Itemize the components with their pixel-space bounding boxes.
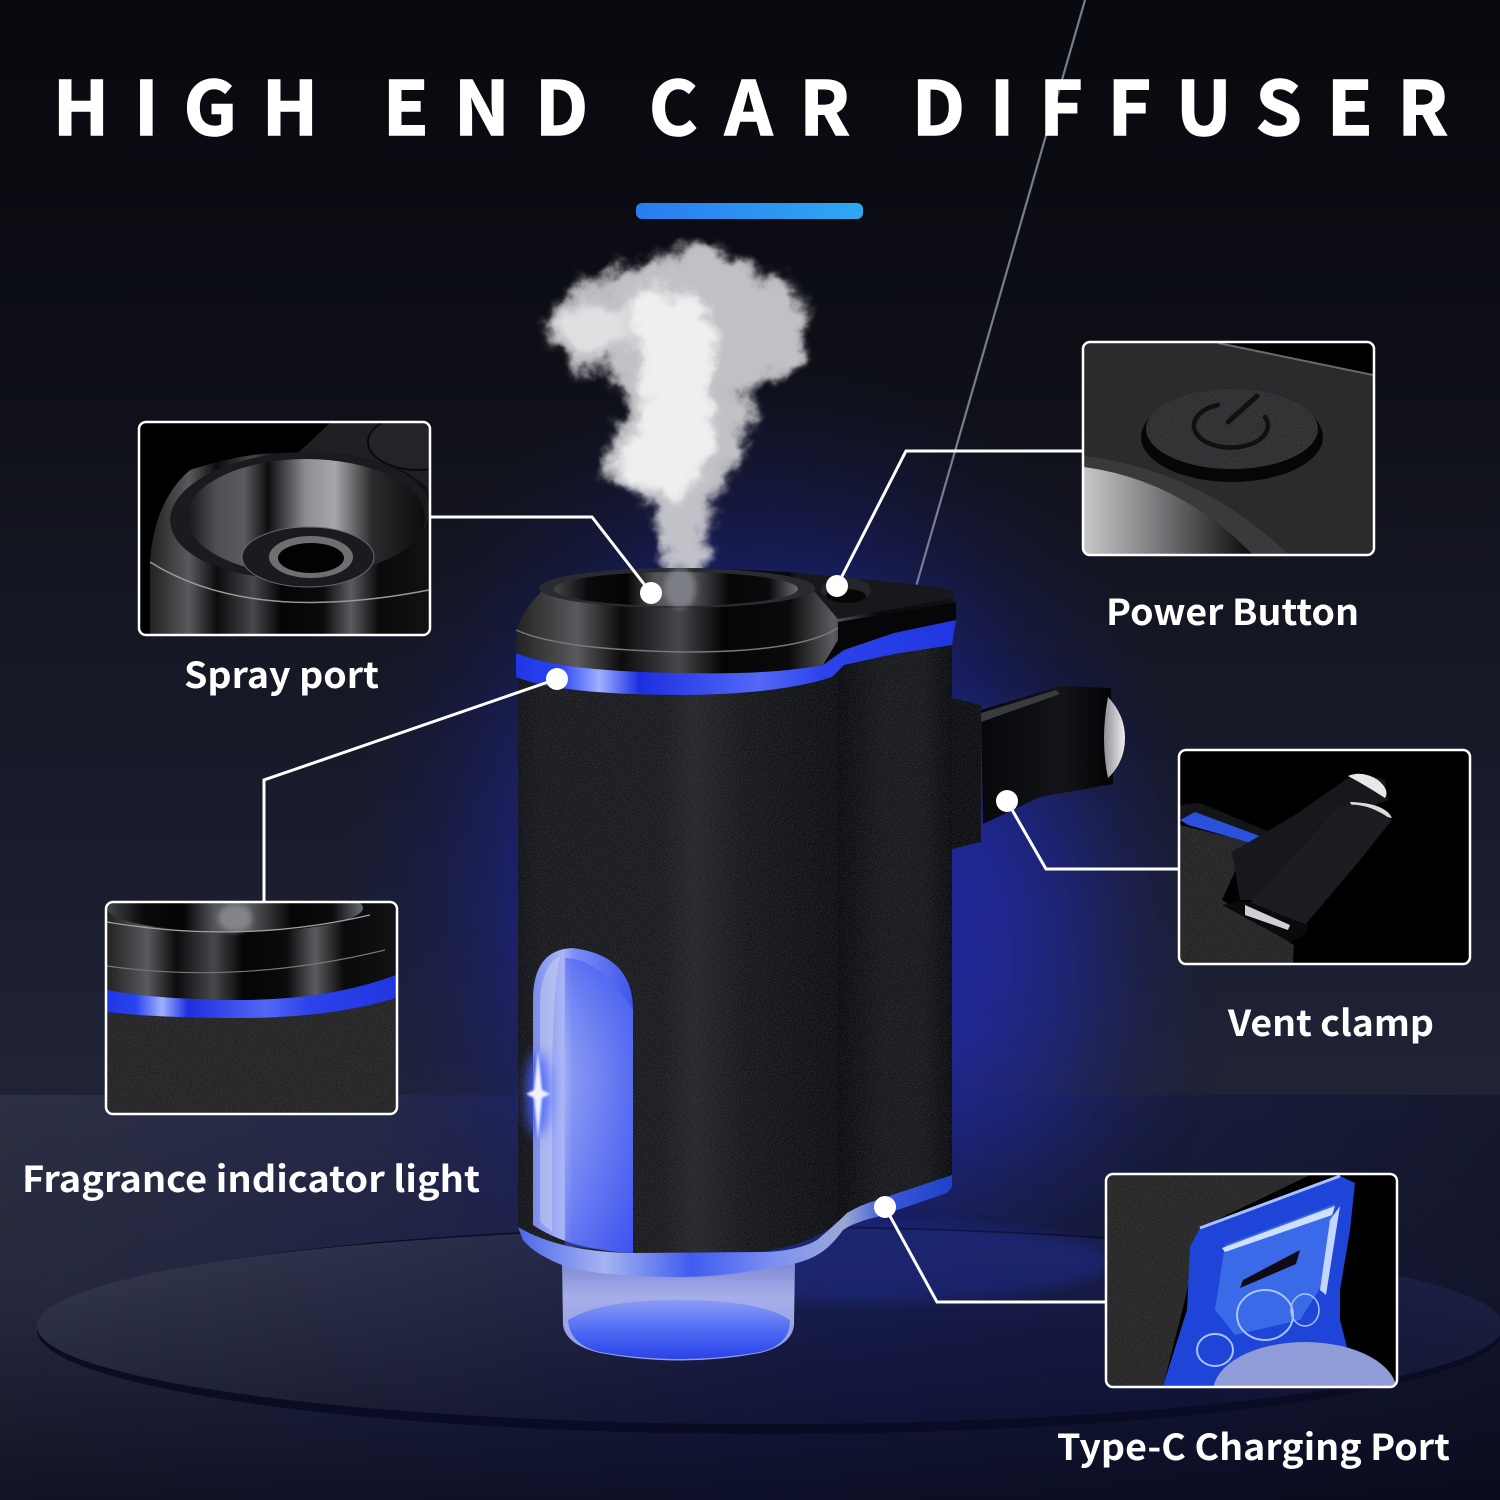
panel: power button — [1083, 342, 1374, 555]
vent clamp on device — [952, 686, 1125, 849]
transparent base rim — [518, 1175, 952, 1277]
panel: fragrance indicator light — [106, 884, 397, 1114]
label: fragrance indicator light: Fragrance indicator light — [22, 1151, 480, 1203]
blue light ring — [516, 620, 956, 695]
label: vent clamp: Vent clamp — [1227, 995, 1434, 1047]
label: spray port: Spray port — [184, 647, 379, 699]
callout: type-c port — [874, 1196, 1106, 1302]
title: DIFFUSER — [912, 50, 1448, 157]
bottom bottle — [562, 1262, 795, 1360]
rear lobe body — [838, 610, 952, 1235]
panel: type-c charging port — [1104, 1172, 1398, 1388]
steam rising through the port — [664, 568, 696, 608]
front body — [518, 660, 838, 1258]
title — [53, 50, 1448, 157]
title: HIGH — [53, 50, 318, 157]
title: CAR — [649, 50, 850, 157]
title: END — [383, 50, 588, 157]
lid — [516, 568, 956, 673]
thin diagonal light line — [915, 0, 1085, 590]
label: power button: Power Button — [1106, 584, 1359, 636]
callout: spray port — [431, 517, 662, 604]
mist plume — [550, 245, 808, 607]
callout: vent clamp — [996, 790, 1178, 869]
indicator window — [526, 948, 633, 1253]
panel: vent clamp — [1179, 750, 1470, 964]
callout: indicator light — [264, 668, 568, 902]
title accent bar — [636, 203, 863, 219]
label: type-c charging port: Type-C Charging Port — [1057, 1419, 1450, 1471]
callout: power button — [826, 451, 1083, 597]
diffuser device — [516, 568, 956, 1360]
panel: spray port — [138, 420, 432, 636]
platform disc — [37, 1222, 1500, 1434]
